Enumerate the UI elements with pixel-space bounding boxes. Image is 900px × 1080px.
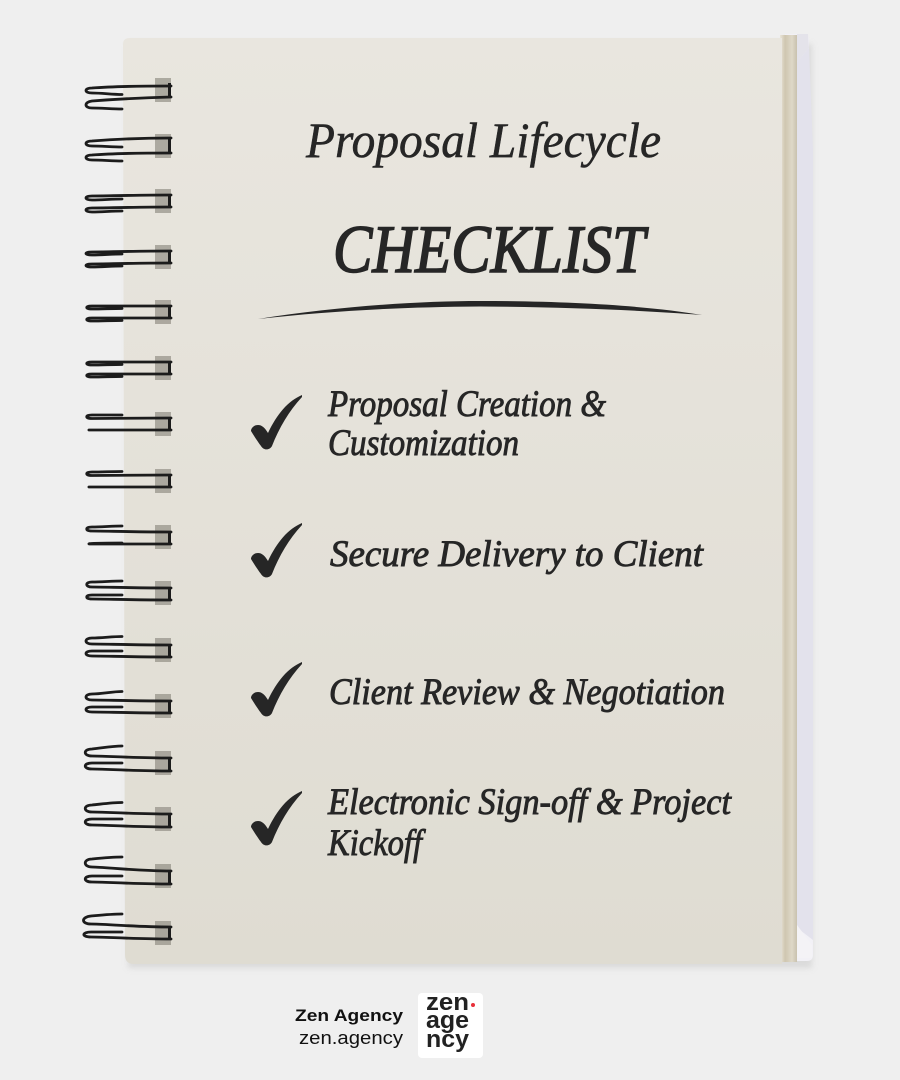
heading: CHECKLIST: CHECKLIST — [333, 211, 649, 287]
ring 12 — [86, 692, 171, 718]
ring 14 — [85, 802, 171, 831]
page — [123, 38, 782, 964]
footer logo — [418, 989, 483, 1058]
footer logo: ncy — [426, 1026, 470, 1053]
ring 7 — [87, 412, 171, 436]
title: Proposal Lifecycle: Proposal Lifecycle — [305, 112, 661, 168]
item 1 text: Proposal Creation & — [327, 384, 606, 425]
ring 11 — [86, 636, 171, 662]
ring 6 — [87, 356, 171, 380]
notebook shadow — [128, 44, 812, 968]
checklist item 1 — [251, 384, 606, 464]
ring 9 — [87, 525, 171, 549]
ring 16 — [84, 914, 171, 945]
ring 2 — [86, 134, 171, 161]
item 3 text: Client Review & Negotiation — [329, 672, 725, 713]
ring 1 — [86, 78, 171, 109]
footer brand text: zen.agency — [299, 1028, 403, 1048]
check icon 4 — [251, 791, 302, 845]
item 4 text: Electronic Sign-off & Project — [327, 782, 733, 823]
check icon 2 — [251, 523, 302, 577]
ring 13 — [85, 746, 171, 775]
check icon 1 — [251, 395, 302, 449]
back cover — [785, 34, 813, 961]
item 4 text — [327, 782, 733, 864]
item 1 text — [327, 384, 606, 464]
footer logo: age — [426, 1007, 469, 1034]
checklist item 2 — [251, 523, 705, 577]
ring 15 — [85, 857, 171, 888]
notebook — [123, 34, 813, 968]
ring 5 — [87, 300, 171, 324]
ring 4 — [86, 245, 171, 269]
ring 3 — [86, 189, 171, 213]
back pages — [780, 35, 797, 962]
underline swoosh — [258, 301, 702, 319]
item 4 text: Kickoff — [327, 823, 426, 864]
footer brand text: Zen Agency — [295, 1006, 404, 1025]
ring 10 — [87, 581, 171, 605]
item 2 text: Secure Delivery to Client — [330, 534, 705, 575]
footer brand text — [295, 1006, 404, 1048]
footer logo: zen — [426, 989, 469, 1016]
checklist item 3 — [251, 662, 725, 716]
spiral binding — [84, 78, 171, 945]
check icon 3 — [251, 662, 302, 716]
checklist item 4 — [251, 782, 733, 864]
ring 8 — [87, 469, 171, 493]
item 1 text: Customization — [328, 423, 519, 464]
